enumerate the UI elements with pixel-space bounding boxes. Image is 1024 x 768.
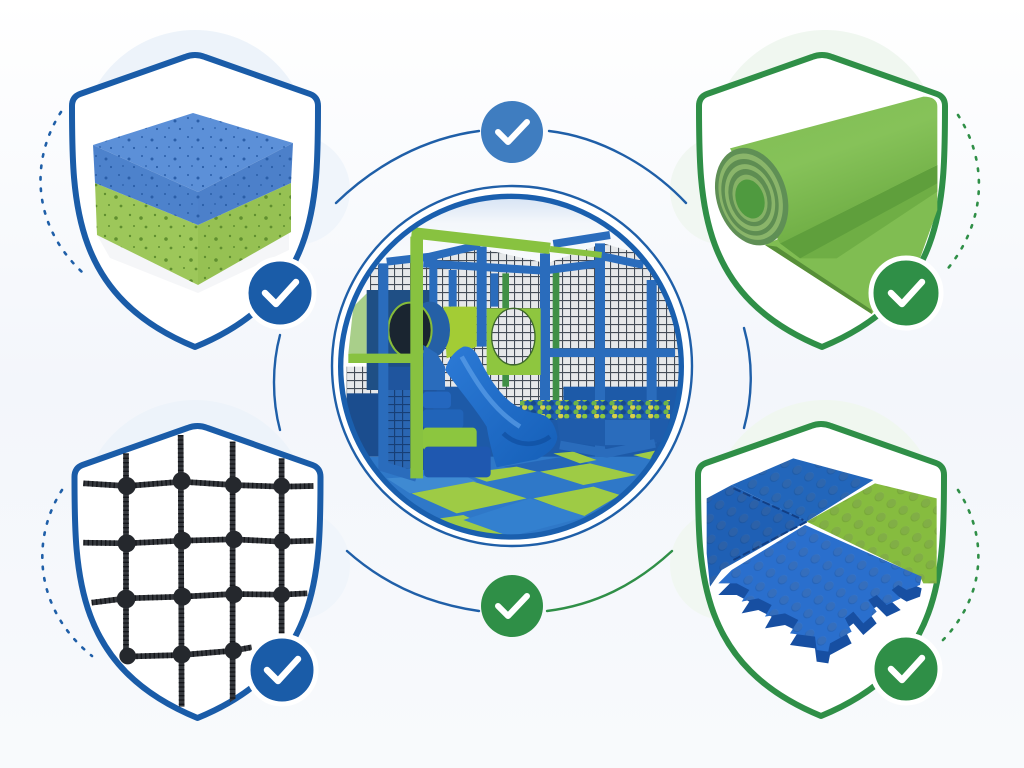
backdrop blobs [80, 30, 940, 630]
round window panel [487, 308, 541, 375]
panel: centre playground image [332, 186, 692, 547]
netting walls [347, 243, 683, 467]
ball pool [520, 400, 670, 453]
floor [370, 450, 655, 534]
back blue poles [387, 235, 675, 457]
icon: check badge [872, 635, 940, 703]
panel: rolled mat shield [699, 55, 945, 347]
panel: rope net shield [74, 426, 320, 718]
icon: check badge [248, 636, 316, 704]
green frame [348, 233, 602, 478]
back green poles [506, 270, 556, 407]
dotted side arcs [41, 112, 979, 656]
panel: foam block shield [72, 55, 318, 347]
icon: foam block [93, 113, 293, 293]
connector arcs [274, 131, 751, 611]
icon: check badge [246, 259, 314, 327]
icon: rope net [83, 435, 313, 707]
icon: puzzle tiles [707, 458, 937, 663]
left structure and stairs [383, 263, 491, 477]
panel: puzzle tiles shield [698, 424, 944, 716]
icon: check badge [871, 258, 941, 328]
icon: rolled mat [703, 97, 937, 314]
slide [445, 346, 557, 467]
icon: bottom check badge [481, 575, 543, 637]
icon: top check badge [481, 101, 543, 163]
tube [388, 302, 477, 358]
